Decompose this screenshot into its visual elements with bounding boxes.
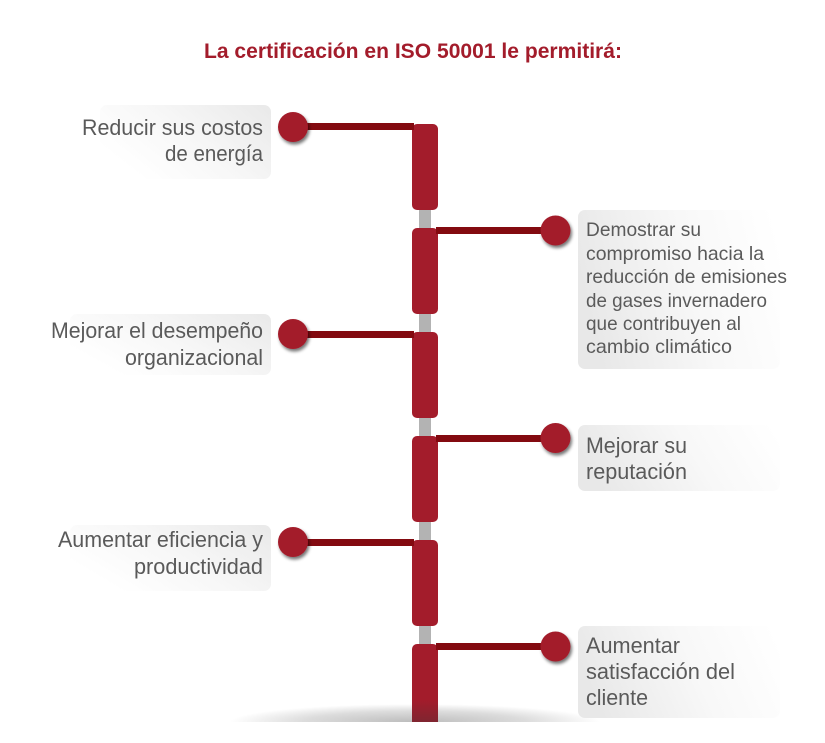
item: Mejorar el desempeño organizacional bbox=[51, 314, 414, 375]
spine segment 2 bbox=[412, 228, 438, 314]
label text: cliente bbox=[586, 685, 648, 710]
label text: reputación bbox=[586, 459, 687, 484]
ground shadow bbox=[247, 706, 582, 722]
label text bbox=[586, 433, 687, 484]
item: Aumentar satisfacción del cliente bbox=[436, 626, 780, 718]
label text: que contribuyen al bbox=[586, 313, 741, 335]
connector bbox=[300, 331, 414, 338]
label panel bbox=[578, 210, 780, 369]
spine segment 3 bbox=[412, 332, 438, 418]
item: Demostrar su compromiso bbox=[436, 210, 787, 369]
connector bbox=[436, 227, 548, 234]
label text bbox=[586, 633, 735, 710]
node bbox=[278, 112, 308, 142]
label text bbox=[58, 527, 263, 579]
item: Reducir sus costos de energía bbox=[82, 105, 414, 179]
node bbox=[540, 632, 570, 662]
label panel bbox=[100, 105, 271, 179]
label text bbox=[82, 115, 264, 166]
node bbox=[278, 319, 308, 349]
label text bbox=[586, 219, 787, 358]
node bbox=[278, 527, 308, 557]
item: Aumentar eficiencia y productividad bbox=[58, 525, 414, 591]
label text: Aumentar bbox=[586, 633, 680, 658]
label text: satisfacción del bbox=[586, 659, 735, 684]
label text: Mejorar el desempeño bbox=[51, 318, 263, 343]
label text: Reducir sus costos bbox=[82, 115, 263, 140]
label text: cambio climático bbox=[586, 336, 732, 358]
label text bbox=[51, 318, 263, 370]
label panel bbox=[578, 626, 780, 718]
central spine bbox=[412, 124, 438, 722]
spine segment 1 bbox=[412, 124, 438, 210]
label text: productividad bbox=[134, 554, 263, 579]
label text: Aumentar eficiencia y bbox=[58, 527, 263, 552]
connector bbox=[300, 539, 414, 546]
label text: organizacional bbox=[125, 345, 263, 370]
connector bbox=[300, 123, 414, 130]
item: Mejorar su reputación bbox=[436, 423, 780, 491]
connector bbox=[436, 435, 548, 442]
spine segment 4 bbox=[412, 436, 438, 522]
label text: reducción de emisiones bbox=[586, 266, 787, 288]
spine segment 6 bbox=[412, 644, 438, 722]
node bbox=[540, 423, 570, 453]
spine segment 5 bbox=[412, 540, 438, 626]
title: La certificación en ISO 50001 le permitirá: bbox=[204, 40, 622, 63]
label text: de energía bbox=[165, 141, 264, 166]
label text: Mejorar su bbox=[586, 433, 687, 458]
label text: Demostrar su bbox=[586, 219, 701, 241]
node bbox=[540, 216, 570, 246]
connector bbox=[436, 643, 548, 650]
label text: compromiso hacia la bbox=[586, 243, 764, 265]
label text: de gases invernadero bbox=[586, 290, 767, 312]
label panel bbox=[70, 525, 271, 591]
label panel bbox=[70, 314, 271, 375]
label panel bbox=[578, 425, 780, 491]
